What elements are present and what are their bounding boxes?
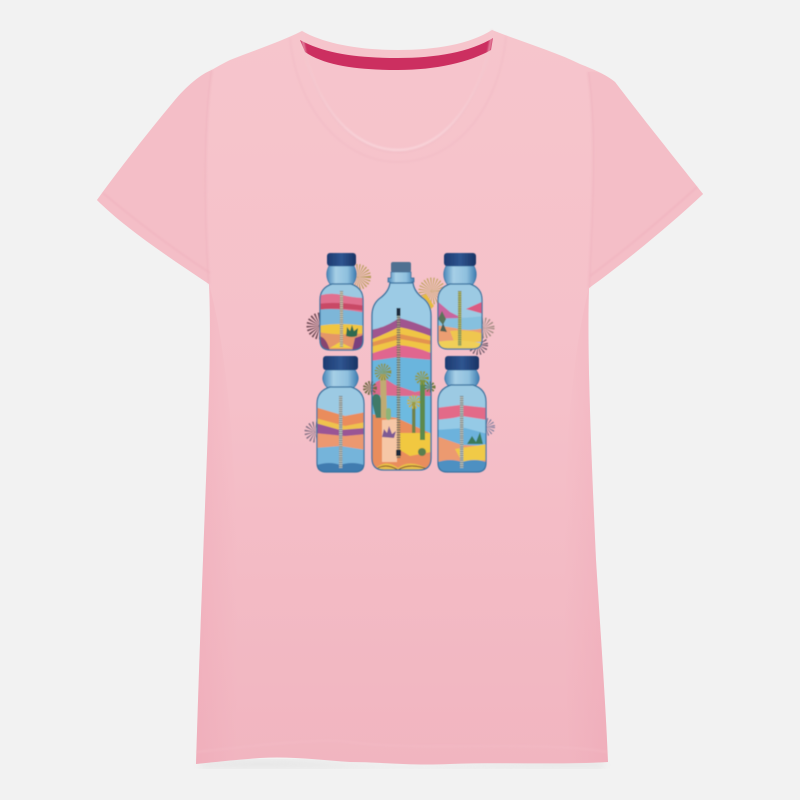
side shading right <box>564 288 608 762</box>
central measuring scale <box>396 308 401 458</box>
print: desert water bottles <box>311 253 490 474</box>
middle cactus <box>412 402 416 433</box>
cap <box>323 356 358 370</box>
bottle: top right <box>436 253 484 351</box>
bottle: top left <box>318 253 366 351</box>
right arm plant <box>428 384 432 390</box>
body layers <box>315 385 366 474</box>
side shading left <box>196 284 237 764</box>
body layers <box>370 282 433 472</box>
body layers <box>436 383 488 474</box>
body outline <box>438 385 486 472</box>
bottle: large centre <box>367 262 434 472</box>
measuring scale <box>458 291 461 346</box>
spiky desert plants behind bottles <box>311 271 490 436</box>
green left arm <box>372 394 381 418</box>
neck <box>327 266 356 285</box>
measuring scale <box>340 291 343 347</box>
red neck label band <box>300 38 493 70</box>
yellow tag on shoulder <box>421 294 434 310</box>
body layers <box>436 283 484 351</box>
purple agave <box>382 426 396 438</box>
measuring scale <box>460 396 463 468</box>
spiky left plant <box>367 385 373 391</box>
right crown <box>419 375 425 381</box>
bottle: bottom left <box>315 356 366 474</box>
t-shirt <box>97 30 703 765</box>
left sleeve shade <box>97 70 212 284</box>
neck <box>445 370 479 386</box>
small green cactus <box>386 408 391 420</box>
body outline <box>320 284 363 350</box>
left cactus crown <box>379 368 387 376</box>
tall left cactus <box>380 374 387 418</box>
cap <box>327 253 356 266</box>
shirt silhouette <box>97 30 703 765</box>
cap <box>445 356 479 370</box>
collar and seams <box>103 30 697 752</box>
bottom shrub <box>418 448 426 456</box>
hem shadow <box>200 760 604 768</box>
neck <box>388 272 414 286</box>
body outline <box>372 283 431 470</box>
cacti <box>367 368 432 456</box>
cap <box>391 262 411 272</box>
body outline <box>317 387 364 472</box>
bottle: bottom right <box>436 356 488 474</box>
right sleeve shade <box>588 71 703 288</box>
cap <box>444 253 476 266</box>
body layers <box>320 284 364 350</box>
product image: t-shirt with bottle print <box>97 30 703 766</box>
neck <box>444 266 476 285</box>
body outline <box>438 284 482 349</box>
middle crown <box>411 399 417 405</box>
neck <box>323 370 358 388</box>
right cactus <box>420 380 425 440</box>
measuring scale <box>339 396 342 468</box>
